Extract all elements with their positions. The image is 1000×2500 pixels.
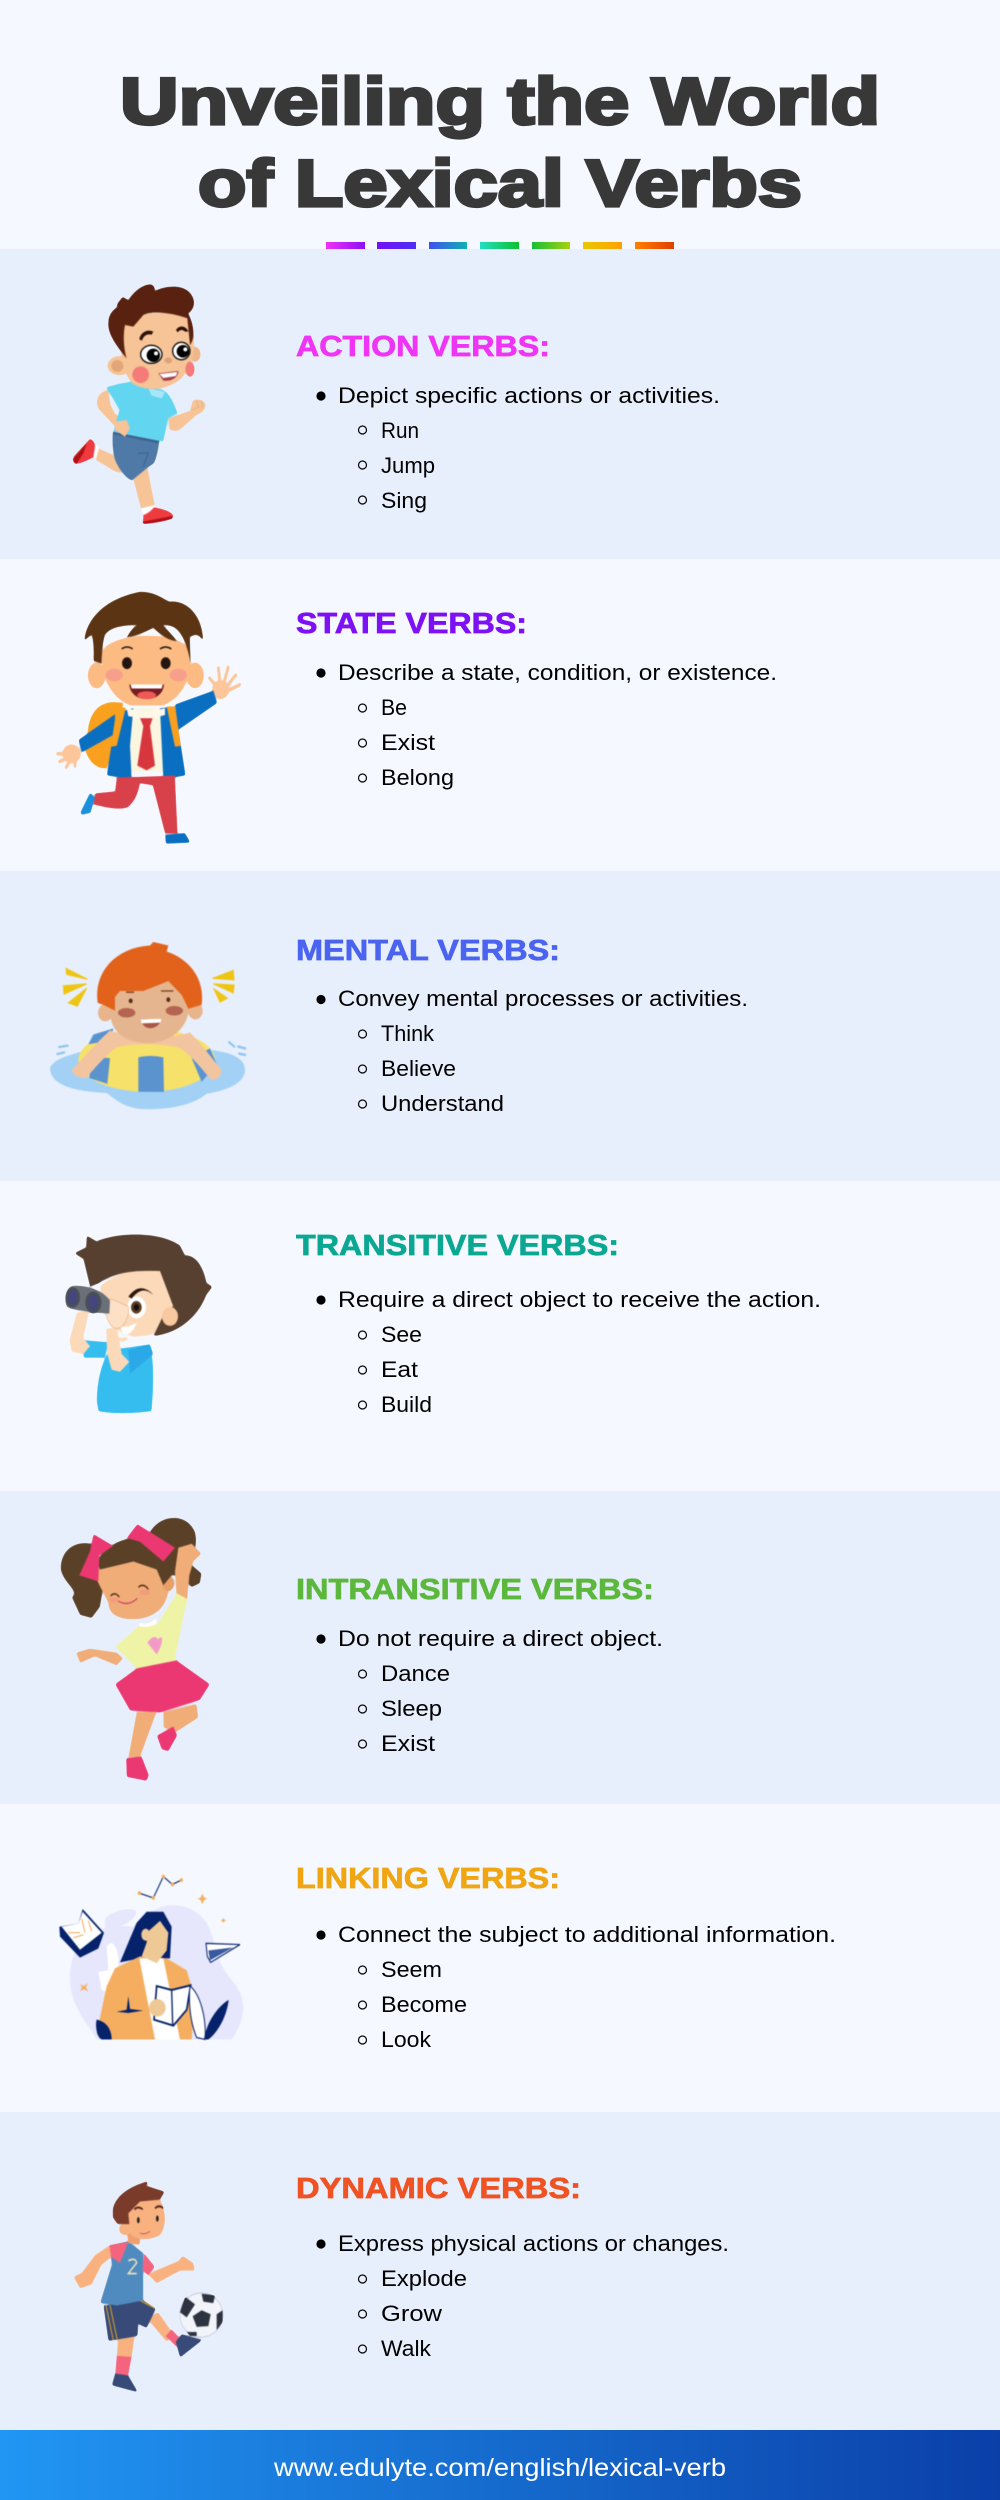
bullet list [316, 1626, 663, 1756]
bullet list: Exist [381, 1731, 436, 1756]
bullet list: Connect the subject to additional information. [338, 1922, 836, 1947]
panel: action verbs [0, 249, 1000, 559]
icon: schoolboy waving [57, 592, 240, 844]
bullet list: See [381, 1322, 422, 1347]
bullet list: Describe a state, condition, or existence. [338, 660, 777, 685]
panel: intransitive verbs [0, 1491, 1000, 1804]
bullet list [316, 1287, 821, 1417]
bullet list [316, 986, 748, 1116]
bullet list: Think [381, 1021, 435, 1046]
bullet list: Convey mental processes or activities. [338, 986, 748, 1011]
bullet list [316, 1922, 836, 2052]
bullet list: Understand [381, 1091, 504, 1116]
color accent bars [326, 242, 674, 249]
icon: dancing girl [61, 1518, 210, 1781]
icon: boy in swim ring [50, 942, 246, 1109]
heading: TRANSITIVE VERBS: [296, 1230, 619, 1262]
panel: state verbs [0, 559, 1000, 871]
bullet list: Sing [381, 488, 427, 513]
bullet list: Grow [381, 2301, 443, 2326]
bullet list [316, 660, 777, 790]
bullet list: Become [381, 1992, 467, 2017]
icon: boy with binoculars [65, 1234, 213, 1413]
bullet list: Jump [381, 453, 435, 478]
heading: LINKING VERBS: [296, 1863, 560, 1895]
panel: dynamic verbs [0, 2112, 1000, 2430]
heading: INTRANSITIVE VERBS: [296, 1574, 654, 1606]
bullet list: Run [381, 418, 419, 443]
heading: MENTAL VERBS: [296, 935, 560, 967]
bullet list: Require a direct object to receive the action. [338, 1287, 821, 1312]
bullet list: Explode [381, 2266, 467, 2291]
footer bar [0, 2430, 1000, 2500]
icon: boy kicking a ball [73, 2181, 223, 2393]
title: of Lexical Verbs [198, 146, 802, 220]
bullet list: Sleep [381, 1696, 442, 1721]
panel: transitive verbs [0, 1181, 1000, 1491]
bullet list: Belong [381, 765, 454, 790]
bullet list: Depict specific actions or activities. [338, 383, 720, 408]
bullet list: Build [381, 1392, 432, 1417]
bullet list [316, 2231, 729, 2361]
bullet list: Seem [381, 1957, 442, 1982]
bullet list: Eat [381, 1357, 419, 1382]
icon: woman reading [59, 1875, 243, 2039]
bullet list: Dance [381, 1661, 450, 1686]
bullet list: Exist [381, 730, 436, 755]
bullet list: Believe [381, 1056, 456, 1081]
title [120, 64, 880, 220]
panel: mental verbs [0, 871, 1000, 1181]
bullet list [316, 383, 720, 513]
heading: STATE VERBS: [296, 608, 527, 640]
bullet list: Walk [381, 2336, 432, 2361]
footer bar: www.edulyte.com/english/lexical-verb [273, 2454, 726, 2482]
heading: DYNAMIC VERBS: [296, 2173, 581, 2205]
heading: ACTION VERBS: [296, 331, 550, 363]
bullet list: Do not require a direct object. [338, 1626, 663, 1651]
panel: linking verbs [0, 1804, 1000, 2112]
icon: running boy [73, 284, 206, 524]
title: Unveiling the World [120, 64, 880, 138]
bullet list: Express physical actions or changes. [338, 2231, 729, 2256]
bullet list: Be [381, 695, 407, 720]
bullet list: Look [381, 2027, 432, 2052]
